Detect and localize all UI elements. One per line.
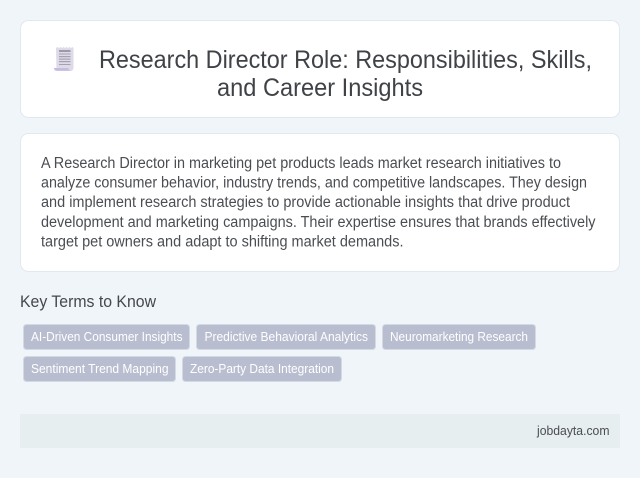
title bbox=[99, 46, 592, 102]
title: and Career Insights bbox=[217, 74, 423, 102]
text block: role description: and implement research strategies to provide actionable insights that drive product bbox=[41, 194, 571, 211]
tag: Zero-Party Data Integration: Zero-Party Data Integration bbox=[190, 361, 334, 376]
title: Research Director Role: Responsibilities, Skills, bbox=[99, 46, 592, 74]
tag: Predictive Behavioral Analytics: Predictive Behavioral Analytics bbox=[204, 329, 368, 344]
text block: role description: A Research Director in marketing pet products leads market research initiatives to bbox=[41, 155, 561, 172]
tag: Sentiment Trend Mapping: Sentiment Trend Mapping bbox=[31, 361, 168, 376]
panel: title card bbox=[20, 20, 620, 118]
tag: Predictive Behavioral Analytics bbox=[196, 324, 376, 350]
footer: site name: jobdayta.com bbox=[536, 423, 610, 438]
tag: Neuromarketing Research: Neuromarketing Research bbox=[390, 329, 528, 344]
heading: key terms: Key Terms to Know bbox=[20, 293, 156, 311]
icon: research document scroll bbox=[54, 47, 74, 71]
tag: AI-Driven Consumer Insights bbox=[24, 324, 190, 350]
tag: Zero-Party Data Integration bbox=[182, 356, 342, 382]
tag: Neuromarketing Research bbox=[382, 324, 536, 350]
tag: Sentiment Trend Mapping bbox=[24, 356, 176, 382]
text block: role description: target pet owners and adapt to shifting market demands. bbox=[41, 234, 404, 250]
text block: role description bbox=[41, 155, 596, 250]
panel: description card bbox=[20, 134, 620, 272]
text block: role description: development and marketing campaigns. Their expertise ensures that brands effectively bbox=[41, 214, 596, 231]
footer bar bbox=[20, 414, 620, 448]
text block: role description: analyze consumer behavior, industry trends, and competitive landscapes. They design bbox=[41, 174, 587, 192]
tag: AI-Driven Consumer Insights: AI-Driven Consumer Insights bbox=[31, 329, 183, 344]
